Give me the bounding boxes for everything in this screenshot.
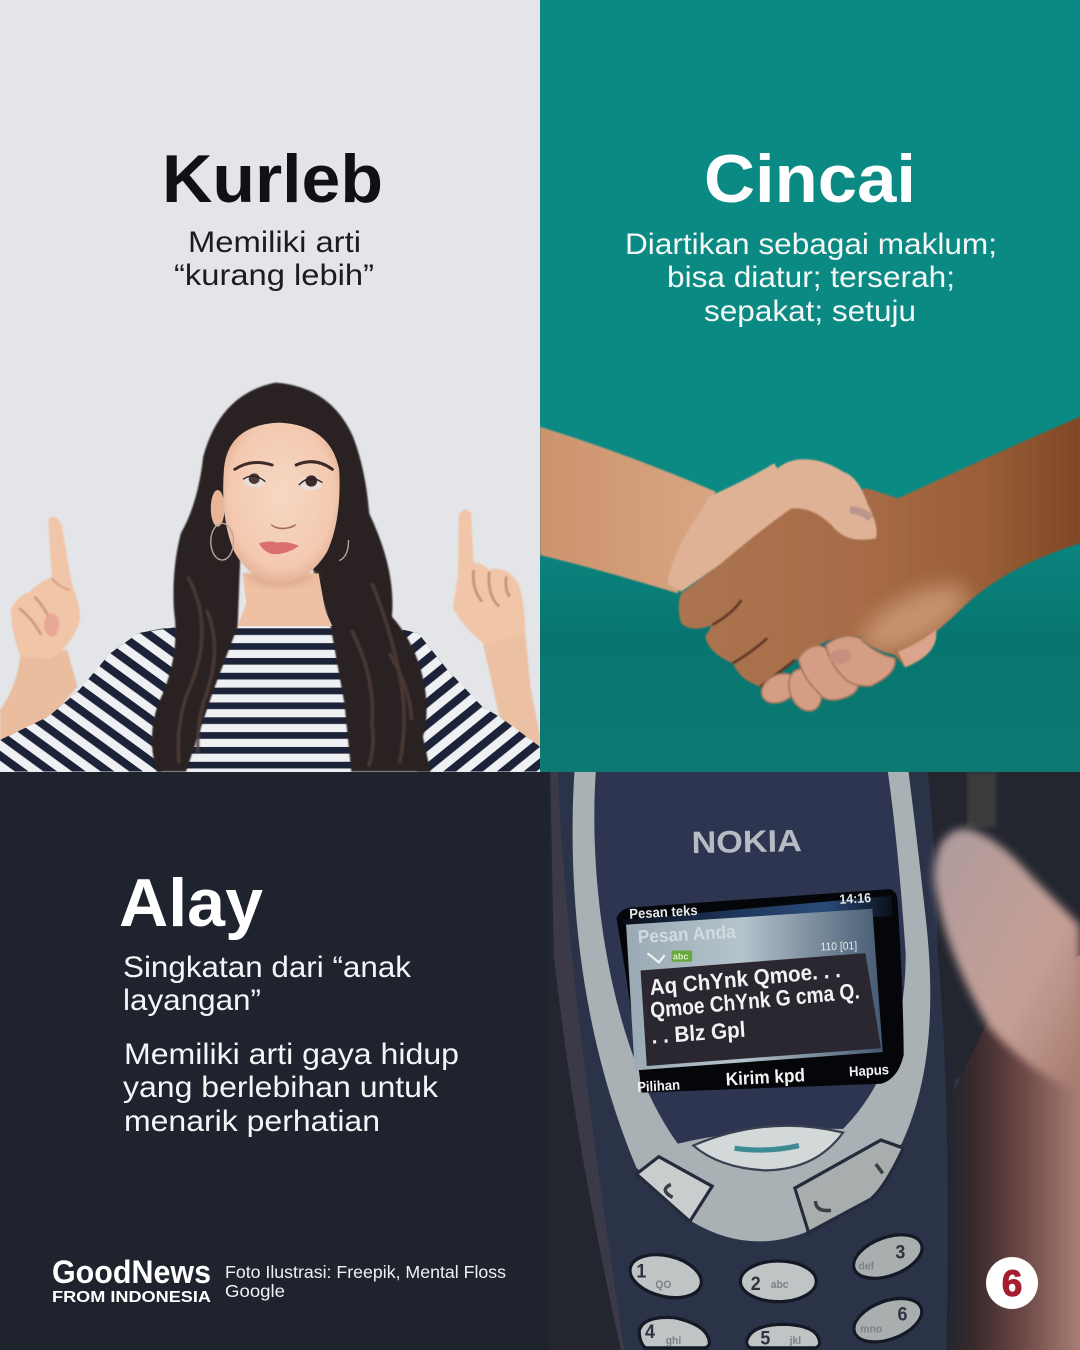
phone screen: Kirim kpd bbox=[725, 1065, 805, 1090]
logo: GoodNews from Indonesia: FROM INDONESIA bbox=[52, 1289, 211, 1306]
photo: handshake bbox=[540, 417, 1080, 715]
wrapped fingers bbox=[756, 636, 895, 715]
photo credit: Foto Ilustrasi: Freepik, Mental Floss bbox=[225, 1262, 506, 1282]
light-skinned arm bbox=[540, 427, 716, 593]
number keys: mno bbox=[860, 1323, 883, 1336]
light-skinned palm bbox=[667, 463, 802, 592]
text: Cincai meaning: bisa diatur; terserah; bbox=[667, 261, 955, 294]
silver bezel ring bbox=[573, 772, 930, 1241]
text: Alay description: yang berlebihan untuk bbox=[123, 1071, 439, 1104]
number keys bbox=[626, 1226, 927, 1350]
earrings bbox=[211, 523, 349, 561]
heading: Alay: Alay bbox=[119, 865, 263, 941]
page number badge: 6 bbox=[1002, 1263, 1022, 1304]
text: Kurleb meaning bbox=[174, 226, 374, 292]
text: Alay definition bbox=[123, 951, 412, 1017]
phone screen: Pesan teks bbox=[629, 902, 698, 922]
number keys: ghi bbox=[666, 1335, 681, 1347]
neck bbox=[238, 573, 332, 626]
number keys: 4 bbox=[645, 1320, 656, 1342]
text: Kurleb meaning: “kurang lebih” bbox=[174, 259, 374, 292]
fingernail bbox=[829, 650, 851, 664]
text: Alay description bbox=[123, 1038, 459, 1138]
eyes bbox=[243, 473, 322, 490]
darker arm and hand bbox=[679, 417, 1080, 687]
panel: Cincai bbox=[540, 0, 1080, 772]
number keys: 3 bbox=[895, 1241, 905, 1263]
panel: Alay bbox=[0, 772, 1080, 1350]
number keys: 2 bbox=[751, 1272, 761, 1294]
panel: Kurleb bbox=[0, 0, 540, 772]
pinky fingertip bbox=[898, 630, 936, 667]
striped shirt bbox=[0, 623, 540, 772]
navigation keys bbox=[636, 1126, 903, 1232]
phone body bbox=[550, 772, 948, 1350]
heading: Cincai: Cincai bbox=[704, 141, 916, 217]
phone screen: abc bbox=[673, 951, 688, 962]
text: Kurleb meaning: Memiliki arti bbox=[188, 226, 361, 259]
text: Alay definition: layangan” bbox=[123, 984, 261, 1017]
face bbox=[223, 423, 340, 583]
phone screen bbox=[616, 889, 904, 1095]
heading: Kurleb: Kurleb bbox=[162, 141, 383, 217]
number keys: abc bbox=[771, 1279, 789, 1291]
photo: Nokia phone held in hand bbox=[540, 770, 1080, 1350]
text: Cincai meaning bbox=[625, 228, 997, 328]
hair bbox=[152, 383, 431, 772]
phone screen: Hapus bbox=[849, 1062, 889, 1079]
page number badge bbox=[986, 1257, 1038, 1309]
photo: woman pointing upward bbox=[0, 383, 540, 772]
arm and hand: right bbox=[453, 510, 540, 748]
text: Alay description: Memiliki arti gaya hidup bbox=[124, 1038, 459, 1071]
phone screen: Aq ChYnk Qmoe. . . bbox=[649, 957, 842, 1000]
number keys: 6 bbox=[897, 1303, 907, 1325]
text: Alay description: menarik perhatian bbox=[124, 1105, 380, 1138]
arm and hand: left bbox=[0, 517, 80, 740]
number keys: 5 bbox=[760, 1327, 770, 1349]
photo credit bbox=[225, 1262, 506, 1301]
phone screen: Pesan Anda bbox=[637, 921, 737, 947]
photo credit: Google bbox=[225, 1281, 285, 1301]
eyebrows bbox=[235, 462, 332, 469]
blurred thumb bbox=[934, 828, 1080, 1092]
logo: GoodNews from Indonesia: GoodNews bbox=[52, 1254, 211, 1290]
thumbnail bbox=[850, 510, 871, 518]
ear bbox=[211, 490, 225, 527]
finger gaps bbox=[712, 600, 795, 687]
phone screen: . . Blz Gpl bbox=[651, 1017, 746, 1049]
photo background bbox=[540, 770, 1080, 1350]
number keys: 1 bbox=[636, 1260, 646, 1282]
earpiece bbox=[735, 782, 750, 790]
phone screen: Pilihan bbox=[637, 1077, 680, 1095]
text: Alay definition: Singkatan dari “anak bbox=[123, 951, 412, 984]
phone face inside ring bbox=[594, 772, 906, 1144]
number keys: jkl bbox=[789, 1335, 801, 1347]
logo: GoodNews from Indonesia bbox=[52, 1254, 211, 1306]
phone screen: Qmoe ChYnk G cma Q. bbox=[649, 979, 861, 1023]
nose bbox=[270, 523, 296, 529]
number keys: def bbox=[859, 1260, 874, 1273]
text: Cincai meaning: Diartikan sebagai maklum; bbox=[625, 228, 997, 261]
hand behind phone bbox=[948, 955, 1080, 1350]
text: Cincai meaning: sepakat; setuju bbox=[704, 295, 916, 328]
wrist highlight clipped to the hand bbox=[858, 577, 974, 658]
thumb over dark hand bbox=[776, 458, 878, 540]
number keys: QO bbox=[655, 1279, 671, 1291]
phone screen: 110 [01] bbox=[820, 940, 857, 954]
phone screen: 14:16 bbox=[839, 890, 871, 907]
logo: NOKIA: NOKIA bbox=[691, 824, 802, 860]
lips bbox=[259, 541, 299, 554]
